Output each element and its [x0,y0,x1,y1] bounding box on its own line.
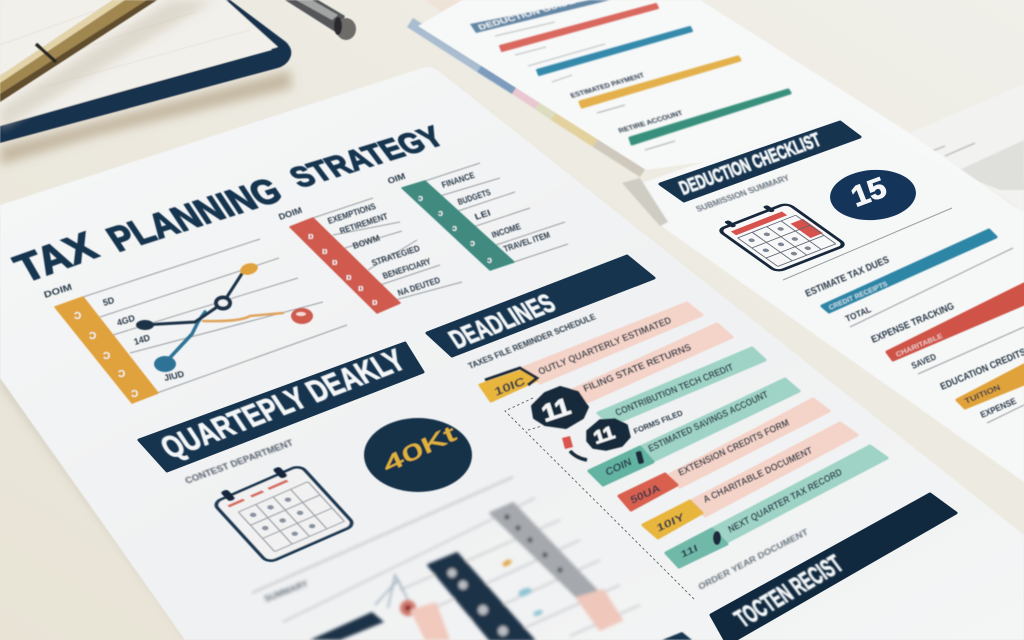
grey column [490,503,622,630]
green progress bar: RETIRE ACCOUNT [617,110,685,135]
red table column [277,198,462,313]
badge: 401k [364,418,472,492]
axis labels: JIUD [163,369,186,383]
heading: deduction checklist: DEDUCTION CHECKLIST [676,129,824,200]
small line plot and label [262,575,450,640]
orange column: Ɔ [74,311,81,322]
teal table column: TRAVEL ITEM [502,230,551,254]
red table column: BOWM [351,233,381,251]
teal table column: BUDGETS [456,187,492,207]
silver pen [285,0,356,40]
title: TAX [7,223,105,291]
row 6: A CHARITABLE DOCUMENT [702,445,814,506]
orange bar row: EXPENSE [979,396,1018,420]
deadline list [480,303,887,567]
blue bar row: ESTIMATE TAX DUES [804,255,891,300]
icon: calendar [713,199,846,272]
teal table column: LEI [473,208,492,222]
teal table column: ɔ [452,223,457,233]
badge: 401k: 40Kt [379,421,459,478]
line chart panel [43,239,347,403]
badge: 15 [828,167,918,223]
chart lines [142,272,283,363]
row 4: ESTIMATED SAVINGS ACCOUNT [647,389,770,455]
row 2 [532,324,732,428]
row 2: FILING STATE RETURNS [582,342,694,395]
orange column [55,297,158,403]
red table column: ɒ [308,231,314,241]
title: STRATEGY [283,120,450,194]
corner of dark block at the bottom [662,632,692,640]
row 3: 11 [591,422,617,448]
row 4: COIN [604,456,633,479]
red bar row: CHARITABLE [895,333,944,359]
heading: deadlines [427,256,654,356]
teal table column: FINANCE [440,170,476,190]
yellow progress bar: ESTIMATED PAYMENT [569,72,647,100]
subheading: quarterly: CONTEST DEPARTMENT [183,438,295,486]
red table column: EXEMPTIONS [326,201,377,226]
row 3: FORMS FILED [632,408,684,436]
green progress bar [617,90,790,150]
blue bar row: CREDIT RECEIPTS [828,281,889,312]
blurred lower bar chart [252,477,640,640]
row 5 [619,399,829,510]
teal table column: INCOME [490,221,522,240]
row 4 [589,379,799,485]
red table column: STRATEGIED [370,243,421,268]
small line plot and label: SUMMARY [262,578,310,604]
teal table column: ɔ [487,255,492,265]
heading: quarterly deakly: QUARTEPLY DEAKLY [153,342,412,465]
red table column: DOIM [277,205,304,222]
heading: deadlines: DEADLINES [443,288,561,354]
fold [622,178,668,226]
caption above lower banner: ORDER YEAR DOCUMENT [697,526,810,592]
gold pen [0,0,157,102]
row 2: 11 [539,392,574,427]
chart markers [136,261,313,372]
red table column: NA DEUTED [396,275,442,298]
small chart markers [501,558,544,617]
sheet edge tabs [407,18,646,177]
paper: upper checklist sheet [407,0,1012,205]
teal table column [386,163,568,270]
red table column: BENEFICIARY [381,256,432,281]
row 3: CONTRIBUTION TECH CREDIT [614,362,735,419]
teal table column: OIM [386,171,407,186]
row 1: 10IC [493,375,527,399]
axis labels: 14D [133,332,152,347]
yellow progress bar [569,57,740,113]
row 7: NEXT QUARTER TAX RECORD [727,467,844,536]
paper: deduction checklist sheet [622,112,1024,482]
blue bar row: TOTAL [844,304,873,324]
notebook [0,0,292,165]
heading: quarterly deakly [139,342,423,471]
row 3 [562,348,765,460]
axis labels: DOIM [43,282,73,300]
subheading: deadlines: TAXES FILE REMINDER SCHEDULE [466,311,598,371]
navy column [428,553,534,640]
pale corner behind sheets [425,0,470,14]
blue bar row [804,230,1013,327]
badge: 15: 15 [847,172,891,214]
red bar row: SAVED [910,351,938,371]
axis labels: 5D [102,295,116,308]
orange bar row [939,347,1024,423]
row 1 [480,303,702,401]
red bar row: EXPENSE TRACKING [870,301,956,346]
teal table column: ɔ [470,238,475,248]
row 1: OUTLY QUARTERLY ESTIMATED [537,315,673,378]
orange column: Ɔ [131,389,138,400]
title [7,120,450,291]
red table column: ɒ [372,297,378,307]
top heading bar [470,0,610,33]
heading: deduction checklist [660,122,860,201]
axis labels: 4GD [116,313,137,328]
icon: quarterly calendar [208,460,355,563]
blue progress bar [528,27,692,82]
orange column: Ɔ [89,331,96,342]
red bar row [870,284,1024,374]
row 7 [666,446,887,567]
red table column: ɒ [358,283,364,293]
teal table column: ɔ [418,193,423,203]
heading: tocten recist: TOCTEN RECIST [729,549,848,633]
axis labels [43,282,186,383]
row 6 [643,423,857,538]
red table column: ɒ [346,272,352,282]
red progress bar [495,4,658,55]
red table column: RETIREMENT [338,211,390,236]
red table column: ɒ [322,246,328,256]
red table column: ɒ [332,257,338,267]
orange column: Ɔ [118,369,125,380]
title: PLANNING [100,172,290,259]
row 7: 11I [680,543,700,561]
dotted connector [505,398,695,600]
subheading: SUBMISSION SUMMARY [694,173,792,214]
top heading bar: DEDUCTION GUIDE [476,0,577,32]
orange column: Ɔ [103,351,110,362]
row 5: 50UA [629,482,662,507]
row 5: EXTENSION CREDITS FORM [677,418,791,479]
paper: back sheet on the right [905,84,1024,212]
teal table column: ɔ [438,208,443,218]
row 6: 10IY [655,511,686,535]
orange bar row: TUITION [963,383,1002,406]
